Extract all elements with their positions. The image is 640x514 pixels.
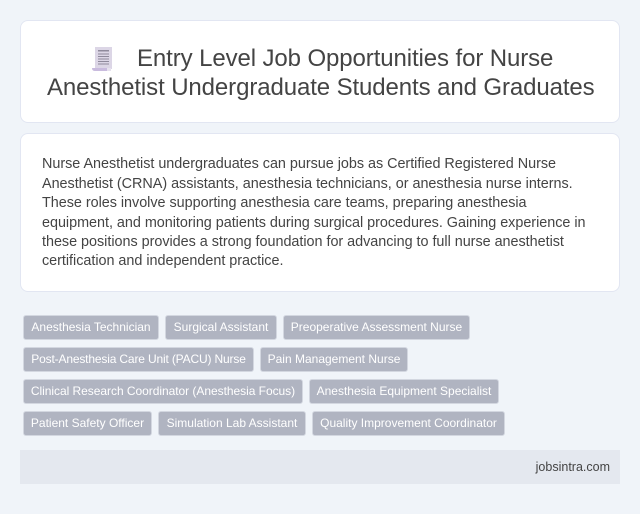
- panel: header: [20, 20, 620, 123]
- job tags: Surgical Assistant: [174, 320, 268, 334]
- panel: description: Anesthetist (CRNA) assistants, anesthesia technicians, or anesthesia nurse interns.: [42, 176, 573, 192]
- panel: description: These roles involve supporting anesthesia care teams, preparing anesthesia: [42, 195, 527, 211]
- panel: description: equipment, and monitoring patients during surgical procedures. Gaining experience in: [42, 215, 585, 231]
- job tags: Clinical Research Coordinator (Anesthesia Focus): [31, 384, 295, 398]
- panel: description: certification and independent practice.: [42, 253, 283, 269]
- panel: description: [20, 133, 620, 292]
- title: Anesthetist Undergraduate Students and Graduates: [47, 74, 595, 101]
- panel: description: these positions provides a strong foundation for advancing to full nurse anesthetist: [42, 234, 564, 250]
- job tags: Quality Improvement Coordinator: [320, 416, 497, 430]
- job tags: Preoperative Assessment Nurse: [291, 320, 462, 334]
- job tags: Anesthesia Equipment Specialist: [317, 384, 491, 398]
- title: Entry Level Job Opportunities for Nurse: [137, 45, 553, 72]
- panel: description: Nurse Anesthetist undergraduates can pursue jobs as Certified Registered Nurse: [42, 156, 556, 172]
- job tags: Pain Management Nurse: [268, 352, 400, 366]
- job tags: Simulation Lab Assistant: [167, 416, 297, 430]
- job tags: [23, 315, 505, 436]
- job tags: Patient Safety Officer: [31, 416, 144, 430]
- icon: document scroll: [92, 47, 112, 71]
- title: [47, 45, 595, 101]
- footer source text: jobsintra.com: [536, 460, 610, 474]
- job tags: Post-Anesthesia Care Unit (PACU) Nurse: [31, 352, 246, 366]
- footer: [20, 450, 620, 484]
- job tags: Anesthesia Technician: [31, 320, 151, 334]
